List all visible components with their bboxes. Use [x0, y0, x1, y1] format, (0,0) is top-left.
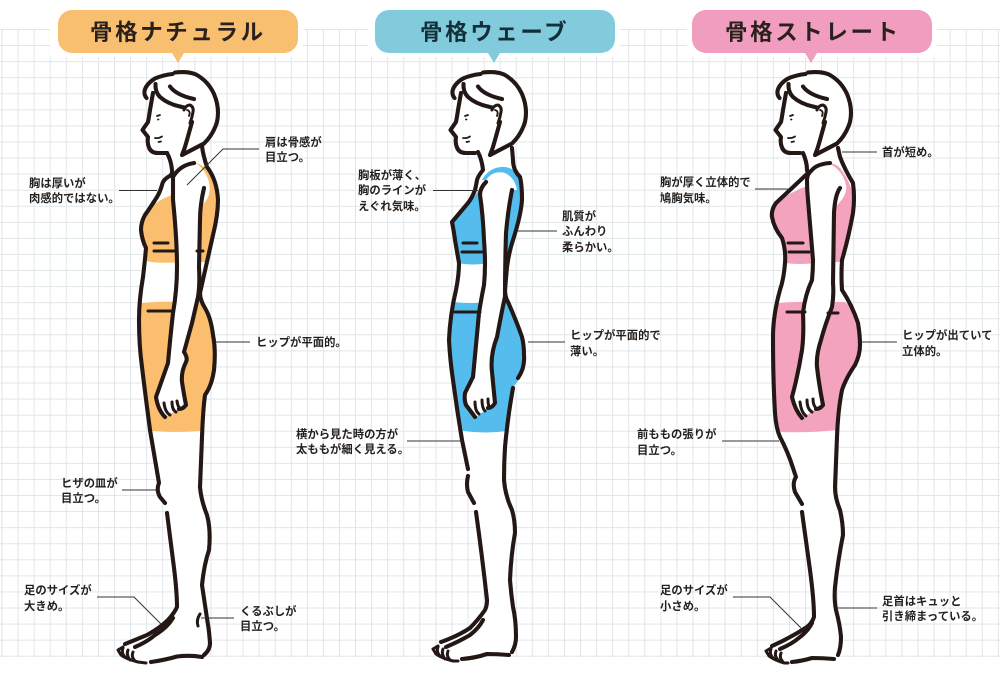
callout: foot size: 足のサイズが — [660, 583, 728, 597]
callout: neck — [842, 145, 939, 159]
callout: knee — [61, 476, 157, 505]
callout: ankle bone: くるぶしが — [240, 604, 297, 618]
callout: ankle: 足首はキュッと — [882, 594, 961, 608]
clothing: natural top and bottoms — [139, 195, 215, 432]
callout: chest — [358, 168, 478, 213]
callout: chest: 胸のラインが — [358, 183, 427, 197]
callout: chest — [29, 176, 157, 205]
callout: hip — [861, 328, 992, 358]
figure: wave body — [433, 72, 526, 661]
heading: natural — [58, 10, 298, 63]
callout: hip — [215, 335, 347, 349]
callout: ankle — [837, 594, 983, 623]
callout: skin: ふんわり — [562, 225, 607, 238]
callout: ankle bone: 目立つ。 — [240, 619, 285, 633]
heading: straight — [692, 10, 932, 63]
panel: wave — [296, 10, 661, 661]
callout: chest: 胸は厚いが — [29, 176, 86, 190]
clothing: straight top and bottoms — [772, 186, 860, 432]
figure: natural head — [142, 72, 218, 155]
figure: wave head — [450, 72, 526, 155]
callout: thigh: 前ももの張りが — [637, 427, 717, 441]
figure: straight body — [766, 72, 860, 663]
callout: thigh: 横から見た時の方が — [296, 427, 399, 441]
clothing: wave top and bottoms — [449, 186, 523, 432]
callout: thigh: 太ももが細く見える。 — [296, 442, 409, 456]
callout: chest: 胸板が薄く、 — [358, 168, 426, 182]
callout: chest — [660, 175, 788, 205]
callout: hip: ヒップが平面的。 — [256, 335, 347, 349]
callout: chest: 胸が厚く立体的で — [660, 175, 751, 189]
heading: natural: 骨格ナチュラル — [90, 20, 266, 45]
callout: skin — [517, 209, 619, 254]
callout: neck: 首が短め。 — [882, 145, 939, 159]
figure: natural body — [118, 72, 218, 663]
callout: thigh — [296, 427, 462, 456]
callout: skin: 柔らかい。 — [562, 240, 619, 254]
callout: thigh: 目立つ。 — [637, 443, 682, 457]
callout: hip: 薄い。 — [570, 344, 604, 358]
callout: chest: 鳩胸気味。 — [660, 191, 717, 205]
callout: thigh — [637, 427, 779, 457]
callout: shoulder: 肩は骨感が — [265, 135, 322, 149]
callout: ankle bone — [201, 604, 297, 633]
heading: wave: 骨格ウェーブ — [420, 19, 569, 45]
heading: wave — [375, 10, 615, 63]
callout: hip: ヒップが出ていて — [902, 328, 992, 342]
callout: hip: ヒップが平面的で — [570, 328, 661, 342]
callout: foot size — [660, 583, 801, 628]
callout: ankle: 引き締まっている。 — [882, 609, 983, 623]
callout: shoulder — [187, 135, 322, 185]
callout: hip: 立体的。 — [902, 344, 947, 358]
callout: chest: えぐれ気味。 — [358, 199, 426, 213]
callout: foot size — [24, 583, 161, 624]
callout: skin: 肌質が — [562, 209, 597, 223]
callout: chest: 肉感的ではない。 — [29, 191, 120, 205]
callout: shoulder: 目立つ。 — [265, 150, 310, 164]
callout: foot size: 足のサイズが — [24, 583, 92, 597]
heading: straight: 骨格ストレート — [725, 20, 901, 45]
figure: straight head — [776, 72, 851, 155]
callout: hip — [528, 328, 661, 358]
panel: straight — [637, 10, 992, 663]
callout: foot size: 小さめ。 — [660, 600, 705, 613]
panel: natural — [24, 10, 347, 663]
callout: knee: ヒザの皿が — [61, 476, 118, 490]
callout: foot size: 大きめ。 — [24, 599, 69, 613]
callout: knee: 目立つ。 — [61, 491, 106, 505]
